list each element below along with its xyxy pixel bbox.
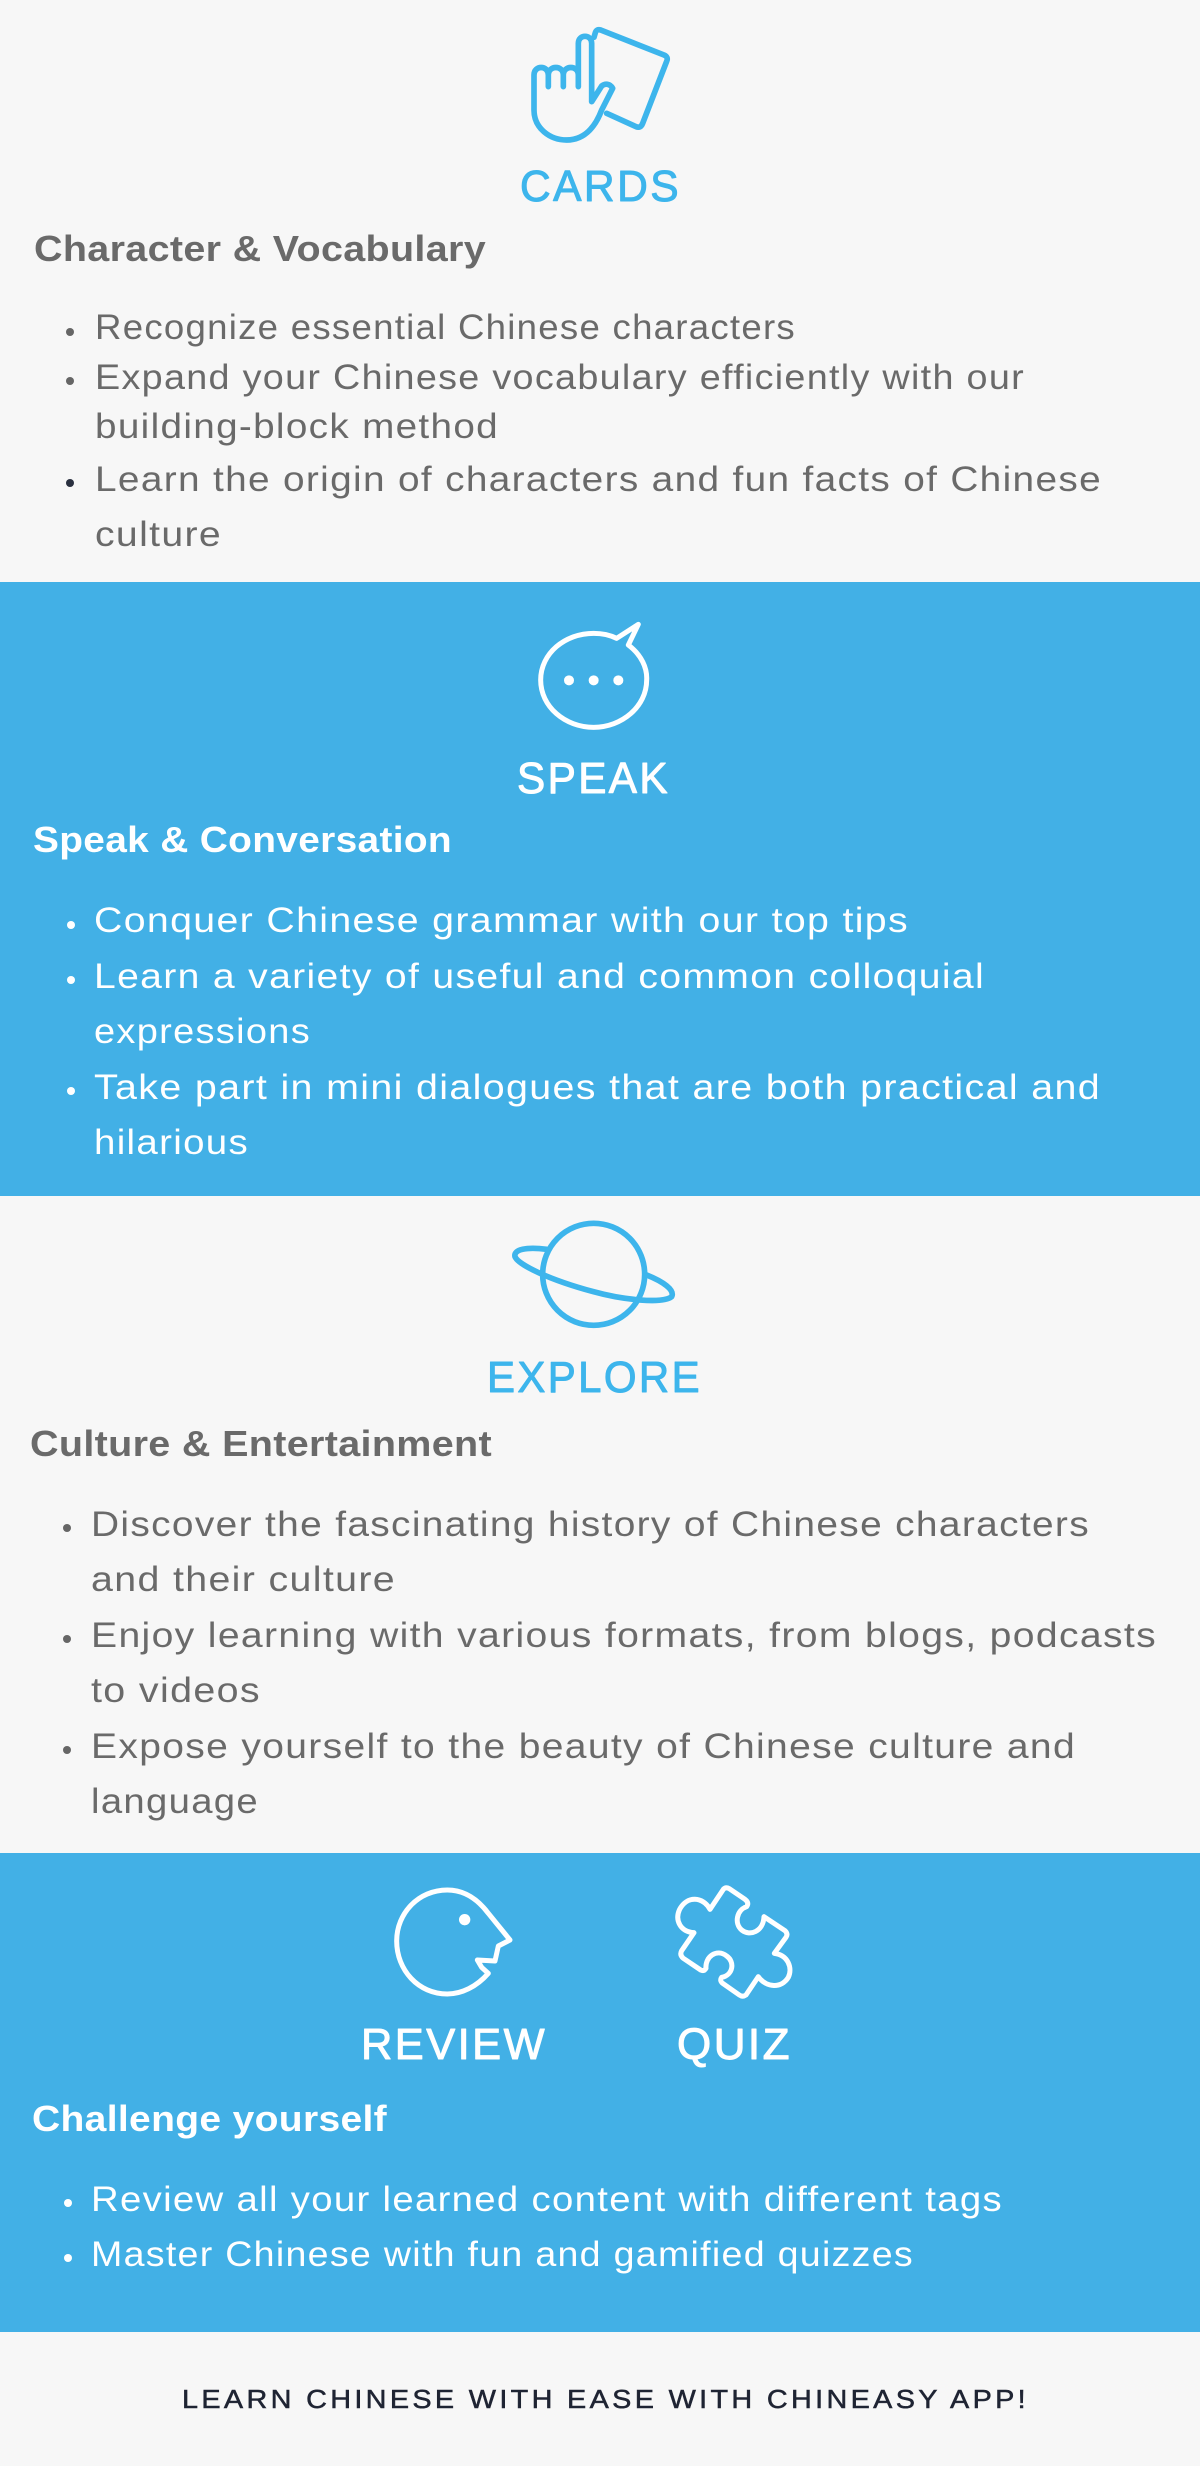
panel: footer <box>0 2332 1200 2466</box>
icon: hand and card <box>534 30 667 140</box>
list: speak bullets: expressions <box>94 1012 311 1051</box>
panel: speak <box>0 582 1200 1196</box>
list: explore bullets <box>63 1505 1157 1821</box>
list: speak bullets: Take part in mini dialogues that are both practical and <box>94 1068 1101 1107</box>
list: cards bullets <box>66 308 1102 554</box>
list: review bullets: Review all your learned content with different tags <box>91 2180 1003 2219</box>
panel: review and quiz <box>0 1853 1200 2332</box>
icon: puzzle piece <box>678 1888 790 1996</box>
label: CARDS: CARDS <box>520 162 681 211</box>
icon: speech bubble <box>541 624 647 727</box>
list: cards bullets: Recognize essential Chinese characters <box>95 308 796 347</box>
heading: Challenge yourself: Challenge yourself <box>32 2098 388 2139</box>
icon: planet <box>515 1223 672 1325</box>
panel: explore <box>0 1196 1200 1853</box>
panel: cards <box>0 0 1200 582</box>
list: cards bullets: culture <box>95 515 222 554</box>
list: explore bullets: Expose yourself to the beauty of Chinese culture and <box>91 1727 1076 1766</box>
heading: Character & Vocabulary: Character & Vocabulary <box>34 228 486 269</box>
list: speak bullets <box>67 901 1101 1162</box>
heading: Speak & Conversation: Speak & Conversation <box>33 819 452 860</box>
footer call to action: LEARN CHINESE WITH EASE WITH CHINEASY APP! <box>182 2384 1029 2414</box>
label: REVIEW: REVIEW <box>361 2020 547 2069</box>
list: explore bullets: Enjoy learning with various formats, from blogs, podcasts <box>91 1616 1157 1655</box>
icon: head <box>397 1890 510 1994</box>
list: explore bullets: to videos <box>91 1671 261 1710</box>
list: cards bullets: Expand your Chinese vocabulary efficiently with our <box>95 358 1025 397</box>
label: EXPLORE: EXPLORE <box>487 1353 702 1402</box>
label: SPEAK: SPEAK <box>517 754 670 803</box>
list: speak bullets: Learn a variety of useful and common colloquial <box>94 957 985 996</box>
list: explore bullets: Discover the fascinating history of Chinese characters <box>91 1505 1090 1544</box>
list: review bullets <box>64 2180 1003 2274</box>
list: review bullets: Master Chinese with fun and gamified quizzes <box>91 2235 914 2274</box>
list: cards bullets: Learn the origin of characters and fun facts of Chinese <box>95 460 1102 499</box>
list: speak bullets: hilarious <box>94 1123 249 1162</box>
list: explore bullets: language <box>91 1782 259 1821</box>
heading: Culture & Entertainment: Culture & Entertainment <box>30 1423 492 1464</box>
label: QUIZ: QUIZ <box>677 2020 792 2069</box>
list: speak bullets: Conquer Chinese grammar with our top tips <box>94 901 909 940</box>
list: cards bullets: building-block method <box>95 407 499 446</box>
list: explore bullets: and their culture <box>91 1560 396 1599</box>
